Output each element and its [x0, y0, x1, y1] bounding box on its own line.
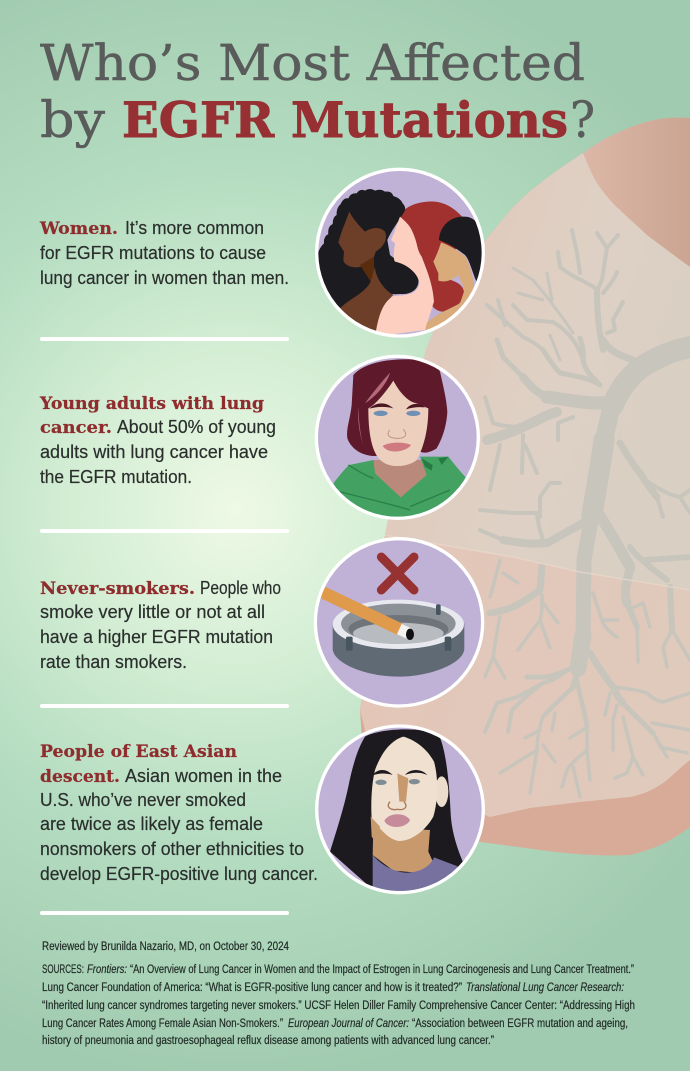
text block: young adults: the EGFR mutation. — [40, 467, 192, 487]
text block: women: Women. — [39, 219, 118, 238]
text block: women: It’s more common — [125, 218, 264, 238]
icon: three women profiles — [317, 169, 485, 340]
text block: young adults: About 50% of young — [117, 417, 276, 437]
text block: never-smokers: rate than smokers. — [40, 652, 187, 672]
sources — [42, 964, 635, 1047]
question mark: ? — [570, 91, 595, 149]
text block: never-smokers: Never-smokers. — [40, 579, 195, 598]
title line 1: Who’s Most Affected — [40, 34, 585, 92]
text block: east asian descent: develop EGFR-positive lung cancer. — [40, 864, 318, 884]
text block: east asian descent: Asian women in the — [125, 766, 282, 786]
text block: east asian descent: People of East Asian — [40, 742, 237, 761]
icon: ashtray with cigarette and X — [315, 539, 483, 706]
text block: east asian descent: U.S. who’ve never smoked — [40, 790, 246, 810]
sources: Translational Lung Cancer Research: — [466, 982, 624, 994]
sources: SOURCES: — [42, 964, 84, 976]
sources: history of pneumonia and gastroesophageal reflux disease among patients with advanced lung cancer.” — [42, 1035, 494, 1047]
sources: Lung Cancer Foundation of America: “What is EGFR-positive lung cancer and how is it treated?” — [42, 982, 462, 994]
icon: young adult portrait — [316, 356, 478, 520]
icon: East Asian woman portrait — [317, 726, 483, 897]
text block: women: lung cancer in women than men. — [40, 268, 289, 288]
text block: east asian descent — [40, 742, 318, 884]
text block: never-smokers — [40, 578, 281, 672]
text block: young adults: Young adults with lung — [39, 394, 264, 413]
review credit: Reviewed by Brunilda Nazario, MD, on October 30, 2024 — [42, 941, 290, 953]
title word by: by — [40, 91, 106, 149]
text block: young adults: cancer. — [40, 418, 112, 437]
text block: never-smokers: have a higher EGFR mutation — [40, 627, 273, 647]
text block: never-smokers: smoke very little or not at all — [40, 602, 265, 622]
title — [40, 34, 595, 149]
text block: young adults: adults with lung cancer have — [40, 442, 268, 462]
title highlight: EGFR Mutations — [122, 91, 568, 149]
lungs illustration — [360, 118, 690, 856]
text block: east asian descent: nonsmokers of other ethnicities to — [40, 839, 304, 859]
text block: east asian descent: are twice as likely as female — [40, 814, 263, 834]
bronchial tree — [480, 230, 690, 797]
sources: Frontiers: — [87, 964, 127, 976]
text block: women — [39, 218, 289, 288]
sources: “Association between EGFR mutation and ageing, — [412, 1018, 628, 1030]
text block: women: for EGFR mutations to cause — [40, 243, 266, 263]
text block: young adults — [39, 394, 276, 487]
text block: never-smokers: People who — [200, 578, 281, 598]
text block: east asian descent: descent. — [40, 767, 120, 786]
sources: Lung Cancer Rates Among Female Asian Non-Smokers.” — [42, 1018, 283, 1030]
sources: European Journal of Cancer: — [288, 1018, 409, 1030]
